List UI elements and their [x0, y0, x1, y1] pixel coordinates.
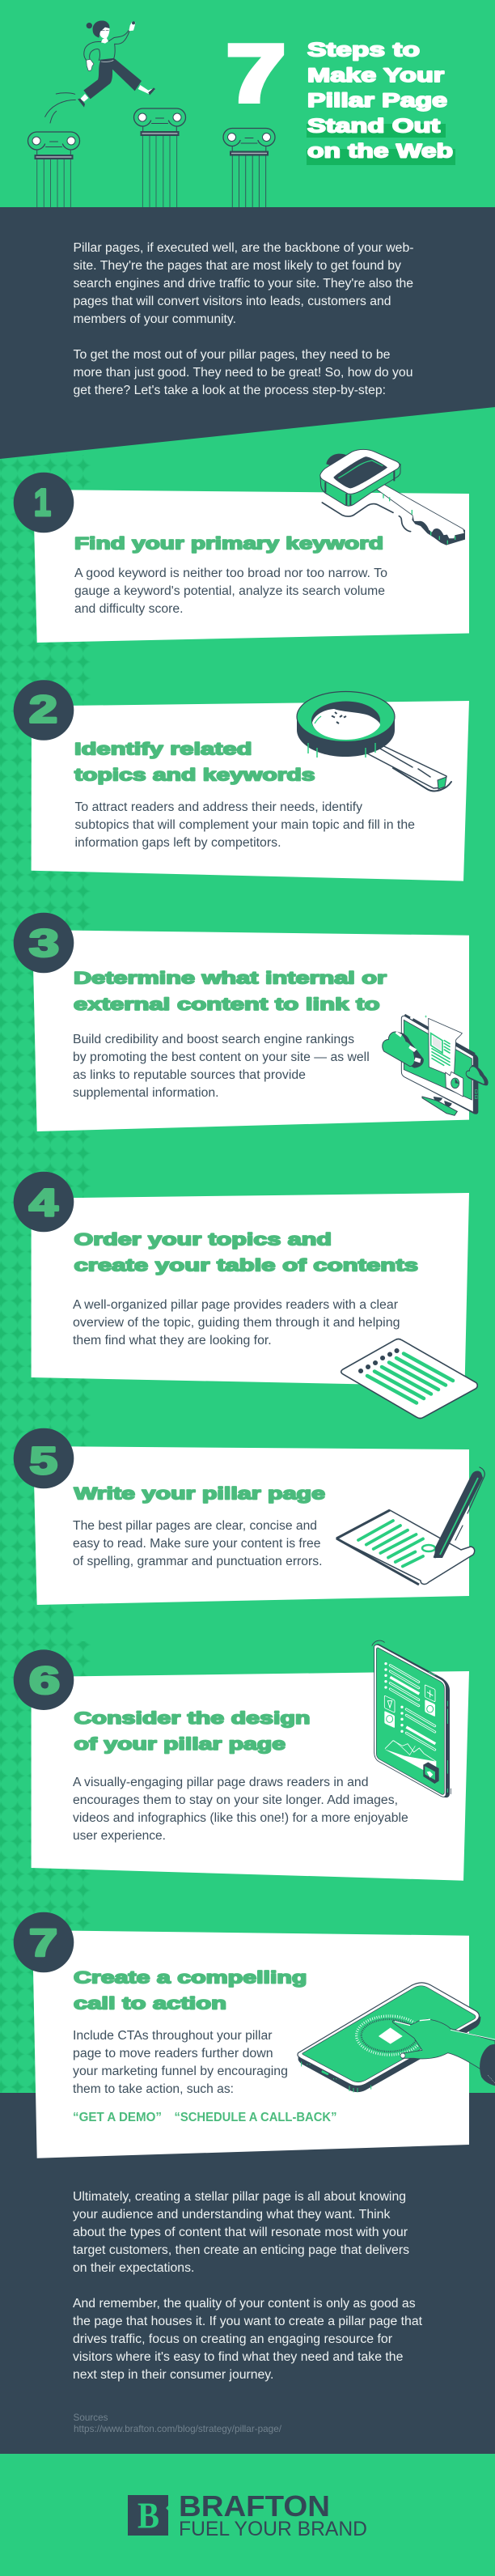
- heading: Write your pillar page: [74, 1484, 325, 1504]
- body text: of spelling, grammar and punctuation errors.: [73, 1555, 322, 1568]
- icon: magnifying glass: [297, 691, 451, 791]
- icon: key: [320, 449, 465, 545]
- dark conclusion band: [0, 2093, 495, 2454]
- icon: table of contents sheet: [341, 1339, 477, 1418]
- body text: user experience.: [73, 1829, 166, 1843]
- sources: https://www.brafton.com/blog/strategy/pillar-page/: [74, 2423, 282, 2434]
- body text: them to take action, such as:: [73, 2082, 234, 2096]
- intro text: pages that will convert visitors into leads, customers and: [73, 295, 391, 308]
- intro text: members of your community.: [73, 312, 236, 326]
- call to action examples: “SCHEDULE A CALL-BACK”: [175, 2111, 336, 2124]
- body text: [74, 800, 415, 850]
- icon: tablet: [372, 1640, 451, 1797]
- heading: [74, 1708, 311, 1754]
- number: 5: [29, 1439, 57, 1482]
- number: 3: [29, 921, 59, 965]
- body text: supplemental information.: [73, 1086, 218, 1100]
- call to action examples: “GET A DEMO”: [73, 2111, 162, 2124]
- logo mark: [128, 2495, 168, 2536]
- body text: page to move readers further down: [73, 2047, 273, 2060]
- card: [33, 1446, 469, 1605]
- heading: [74, 1230, 418, 1275]
- number: 7: [29, 1921, 57, 1964]
- body text: To attract readers and address their needs, identify: [74, 800, 362, 814]
- heading: Create a compelling: [74, 1968, 307, 1988]
- conclusion text: about the types of content that will resonate most with your: [73, 2226, 408, 2239]
- big number 7: 7: [226, 28, 286, 119]
- conclusion text: drives traffic, focus on creating an engaging resource for: [73, 2332, 392, 2346]
- body text: videos and infographics (like this one!) for a more enjoyable: [73, 1811, 408, 1825]
- heading: Consider the design: [74, 1708, 311, 1728]
- intro text: site. They're the pages that are most likely to get found by: [73, 259, 401, 273]
- body text: overview of the topic, guiding them through it and helping: [73, 1316, 400, 1330]
- tagline: FUEL YOUR BRAND: [179, 2518, 367, 2540]
- call to action examples: [73, 2111, 336, 2124]
- intro text: more than just good. They need to be great! So, how do you: [73, 366, 413, 380]
- body text: your marketing funnel by encouraging: [73, 2065, 288, 2078]
- heading: external content to link to: [74, 995, 380, 1014]
- conclusion text: Ultimately, creating a stellar pillar page is all about knowing: [73, 2190, 406, 2204]
- panel: step 7: [14, 1912, 469, 2158]
- panel: step 6: [14, 1649, 469, 1881]
- conclusion text: your audience and understanding what they want. Think: [73, 2208, 391, 2222]
- body text: [73, 2029, 288, 2096]
- conclusion text: And remember, the quality of your content is only as good as: [73, 2297, 416, 2311]
- number badge: [14, 913, 74, 973]
- conclusion text: the page that houses it. If you want to create a pillar page that: [73, 2315, 423, 2328]
- body text: by promoting the best content on your site — as well: [73, 1050, 370, 1064]
- number badge: [14, 1428, 74, 1488]
- body text: as links to reputable sources that provide: [73, 1068, 306, 1082]
- illustration: middle pillar: [134, 108, 186, 207]
- illustration: right pillar: [223, 128, 275, 207]
- card: [32, 1930, 469, 2158]
- panel: step 5: [14, 1428, 469, 1605]
- title highlight bars: [307, 124, 455, 165]
- illustration: left pillar: [28, 132, 79, 207]
- heading: [74, 1968, 307, 2014]
- brand name: BRAFTON: [179, 2489, 330, 2523]
- body text: The best pillar pages are clear, concise and: [73, 1519, 317, 1533]
- number badge: [14, 473, 74, 533]
- sources: [73, 2412, 282, 2434]
- body text: subtopics that will complement your main topic and fill in the: [74, 818, 415, 832]
- card: [32, 701, 469, 881]
- body text: Build credibility and boost search engine rankings: [73, 1033, 354, 1046]
- card: [32, 1193, 469, 1386]
- illustration: jumping woman: [45, 20, 155, 123]
- sources: Sources: [73, 2412, 108, 2423]
- title: Stand Out: [307, 115, 440, 138]
- conclusion text: [73, 2190, 423, 2382]
- intro text: [73, 241, 414, 397]
- panel: step 3: [14, 913, 469, 1131]
- body text: Include CTAs throughout your pillar: [73, 2029, 272, 2043]
- body text: information gaps left by competitors.: [74, 836, 281, 850]
- number: 6: [29, 1659, 60, 1701]
- panel: step 1: [14, 473, 469, 643]
- body text: [74, 567, 387, 616]
- number badge: [14, 1912, 74, 1972]
- card: [32, 1671, 469, 1881]
- number: 1: [34, 481, 51, 524]
- intro text: To get the most out of your pillar pages, they need to be: [73, 348, 390, 362]
- conclusion text: on their expectations.: [73, 2261, 194, 2275]
- number: 4: [29, 1181, 58, 1224]
- intro text: search engines and drive traffic to your site. They're also the: [73, 277, 413, 291]
- body text: [73, 1298, 400, 1347]
- body text: [73, 1519, 322, 1568]
- body text: and difficulty score.: [74, 602, 183, 616]
- body text: [73, 1033, 370, 1100]
- body text: easy to read. Make sure your content is free: [73, 1537, 320, 1551]
- body text: encourages them to stay on your site longer. Add images,: [73, 1793, 398, 1807]
- body text: gauge a keyword's potential, analyze its search volume: [74, 584, 385, 598]
- title: [226, 28, 455, 165]
- logo: Brafton: [128, 2489, 367, 2540]
- body text: [73, 1776, 408, 1843]
- dark intro band: [0, 207, 495, 459]
- panel: step 2: [14, 680, 469, 881]
- icon: monitor with clouds and documents: [383, 1015, 489, 1115]
- heading: topics and keywords: [74, 766, 315, 785]
- body text: them find what they are looking for.: [73, 1334, 272, 1347]
- background star pattern: [0, 455, 91, 2093]
- title: Make Your: [307, 65, 445, 87]
- heading: Order your topics and: [74, 1230, 332, 1250]
- heading: [74, 740, 315, 785]
- title: Pillar Page: [307, 90, 447, 112]
- icon: phone with hand: [298, 1983, 495, 2092]
- heading: Identify related: [74, 740, 252, 759]
- heading: call to action: [74, 1994, 226, 2014]
- heading: [74, 968, 387, 1014]
- number: 2: [29, 688, 57, 730]
- number badge: [14, 680, 74, 741]
- heading: Find your primary keyword: [74, 534, 383, 554]
- card: [32, 930, 469, 1131]
- body text: A good keyword is neither too broad nor too narrow. To: [74, 567, 387, 580]
- intro text: Pillar pages, if executed well, are the backbone of your web-: [73, 241, 414, 255]
- title: on the Web: [307, 141, 453, 162]
- conclusion text: target customers, then create an enticing page that delivers: [73, 2243, 409, 2257]
- icon: document and pen: [336, 1467, 484, 1585]
- logo letter: B: [138, 2496, 159, 2536]
- heading: create your table of contents: [74, 1256, 418, 1275]
- body text: A visually-engaging pillar page draws readers in and: [73, 1776, 369, 1789]
- body text: A well-organized pillar page provides readers with a clear: [73, 1298, 398, 1312]
- conclusion text: next step in their consumer journey.: [73, 2368, 273, 2382]
- card: [33, 490, 469, 643]
- title text: Steps to: [307, 39, 420, 62]
- number badge: [14, 1649, 74, 1710]
- panel: step 4: [14, 1172, 469, 1386]
- number badge: [14, 1172, 74, 1232]
- heading: Determine what internal or: [74, 968, 387, 987]
- conclusion text: visitors where it's easy to find what they need and take the: [73, 2350, 403, 2364]
- intro text: get there? Let's take a look at the process step-by-step:: [73, 384, 386, 397]
- heading: of your pillar page: [74, 1734, 286, 1754]
